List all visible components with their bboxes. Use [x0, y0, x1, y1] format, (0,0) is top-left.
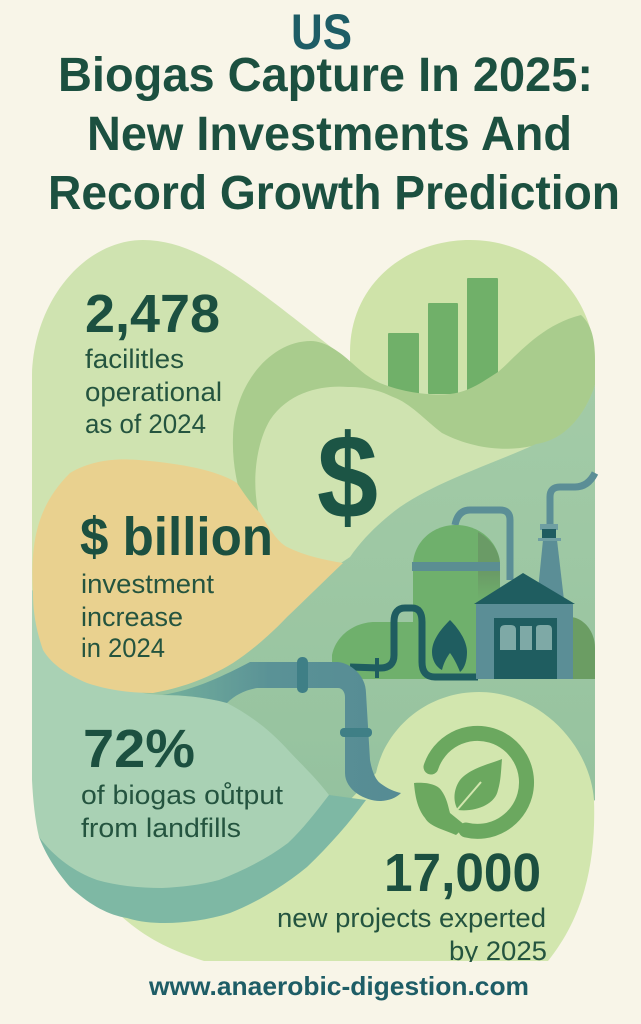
heading line 1: Biogas Capture In 2025: [58, 49, 593, 102]
pipe body [162, 662, 401, 801]
teal left tone under blob [32, 590, 160, 700]
house [474, 573, 575, 679]
label line 1: facilitles [85, 344, 184, 374]
vertical collar [297, 657, 308, 693]
right light green hump [350, 240, 595, 450]
mid green wave [233, 315, 595, 525]
chimney pipe [550, 473, 595, 525]
label line 1: new projects experted [277, 903, 546, 933]
label line 3: as of 2024 [85, 409, 206, 439]
stat: new projects [277, 843, 547, 966]
heading line 2: New Investments And [87, 108, 572, 161]
dollar icon: $ [317, 410, 378, 544]
stat: facilities [85, 284, 222, 439]
tank pipe [455, 510, 510, 580]
dark pipe [350, 608, 478, 677]
right bush [570, 617, 595, 679]
ring [431, 733, 527, 831]
icon: flame [432, 620, 467, 672]
heading: US: US [291, 4, 352, 60]
chimney [537, 524, 564, 600]
number 72%: 72% [83, 719, 195, 779]
horizontal collar [340, 728, 372, 737]
bottom mask [0, 962, 641, 1024]
orange blob [32, 459, 343, 693]
icon: recycling leaf [414, 733, 527, 835]
amount: $ billion [80, 507, 273, 567]
label line 2: from landfills [81, 813, 241, 843]
left bush [332, 622, 420, 679]
label line 2: operational [85, 377, 222, 407]
small leaf [414, 783, 466, 835]
bar chart icon [388, 278, 498, 394]
stat: investment [80, 507, 273, 663]
pipe valve [375, 658, 379, 678]
website footer: www.anaerobic-digestion.com [148, 971, 529, 1001]
label line 2: increase [81, 602, 183, 632]
left light green hump [32, 240, 420, 600]
heading line 3: Record Growth Prediction [48, 167, 620, 220]
label line 2: by 2025 [449, 936, 547, 966]
title block [48, 4, 620, 220]
number 17,000: 17,000 [384, 843, 541, 903]
lime lower blob [120, 692, 594, 961]
leaf vein [457, 782, 481, 810]
number 2,478: 2,478 [85, 284, 220, 344]
stat: landfills [81, 719, 284, 843]
large leaf [454, 759, 502, 810]
label line 1: of biogas oůtput [81, 780, 284, 810]
big pipe [162, 657, 401, 801]
center light green [240, 380, 595, 565]
dark teal crescent [39, 795, 366, 923]
factory illustration [332, 473, 595, 679]
teal lower field [32, 385, 595, 960]
label line 1: investment [81, 569, 215, 599]
leaf blob [32, 680, 329, 888]
label line 3: in 2024 [81, 633, 165, 663]
panel: wave background [32, 240, 595, 600]
storage tank [412, 525, 500, 679]
